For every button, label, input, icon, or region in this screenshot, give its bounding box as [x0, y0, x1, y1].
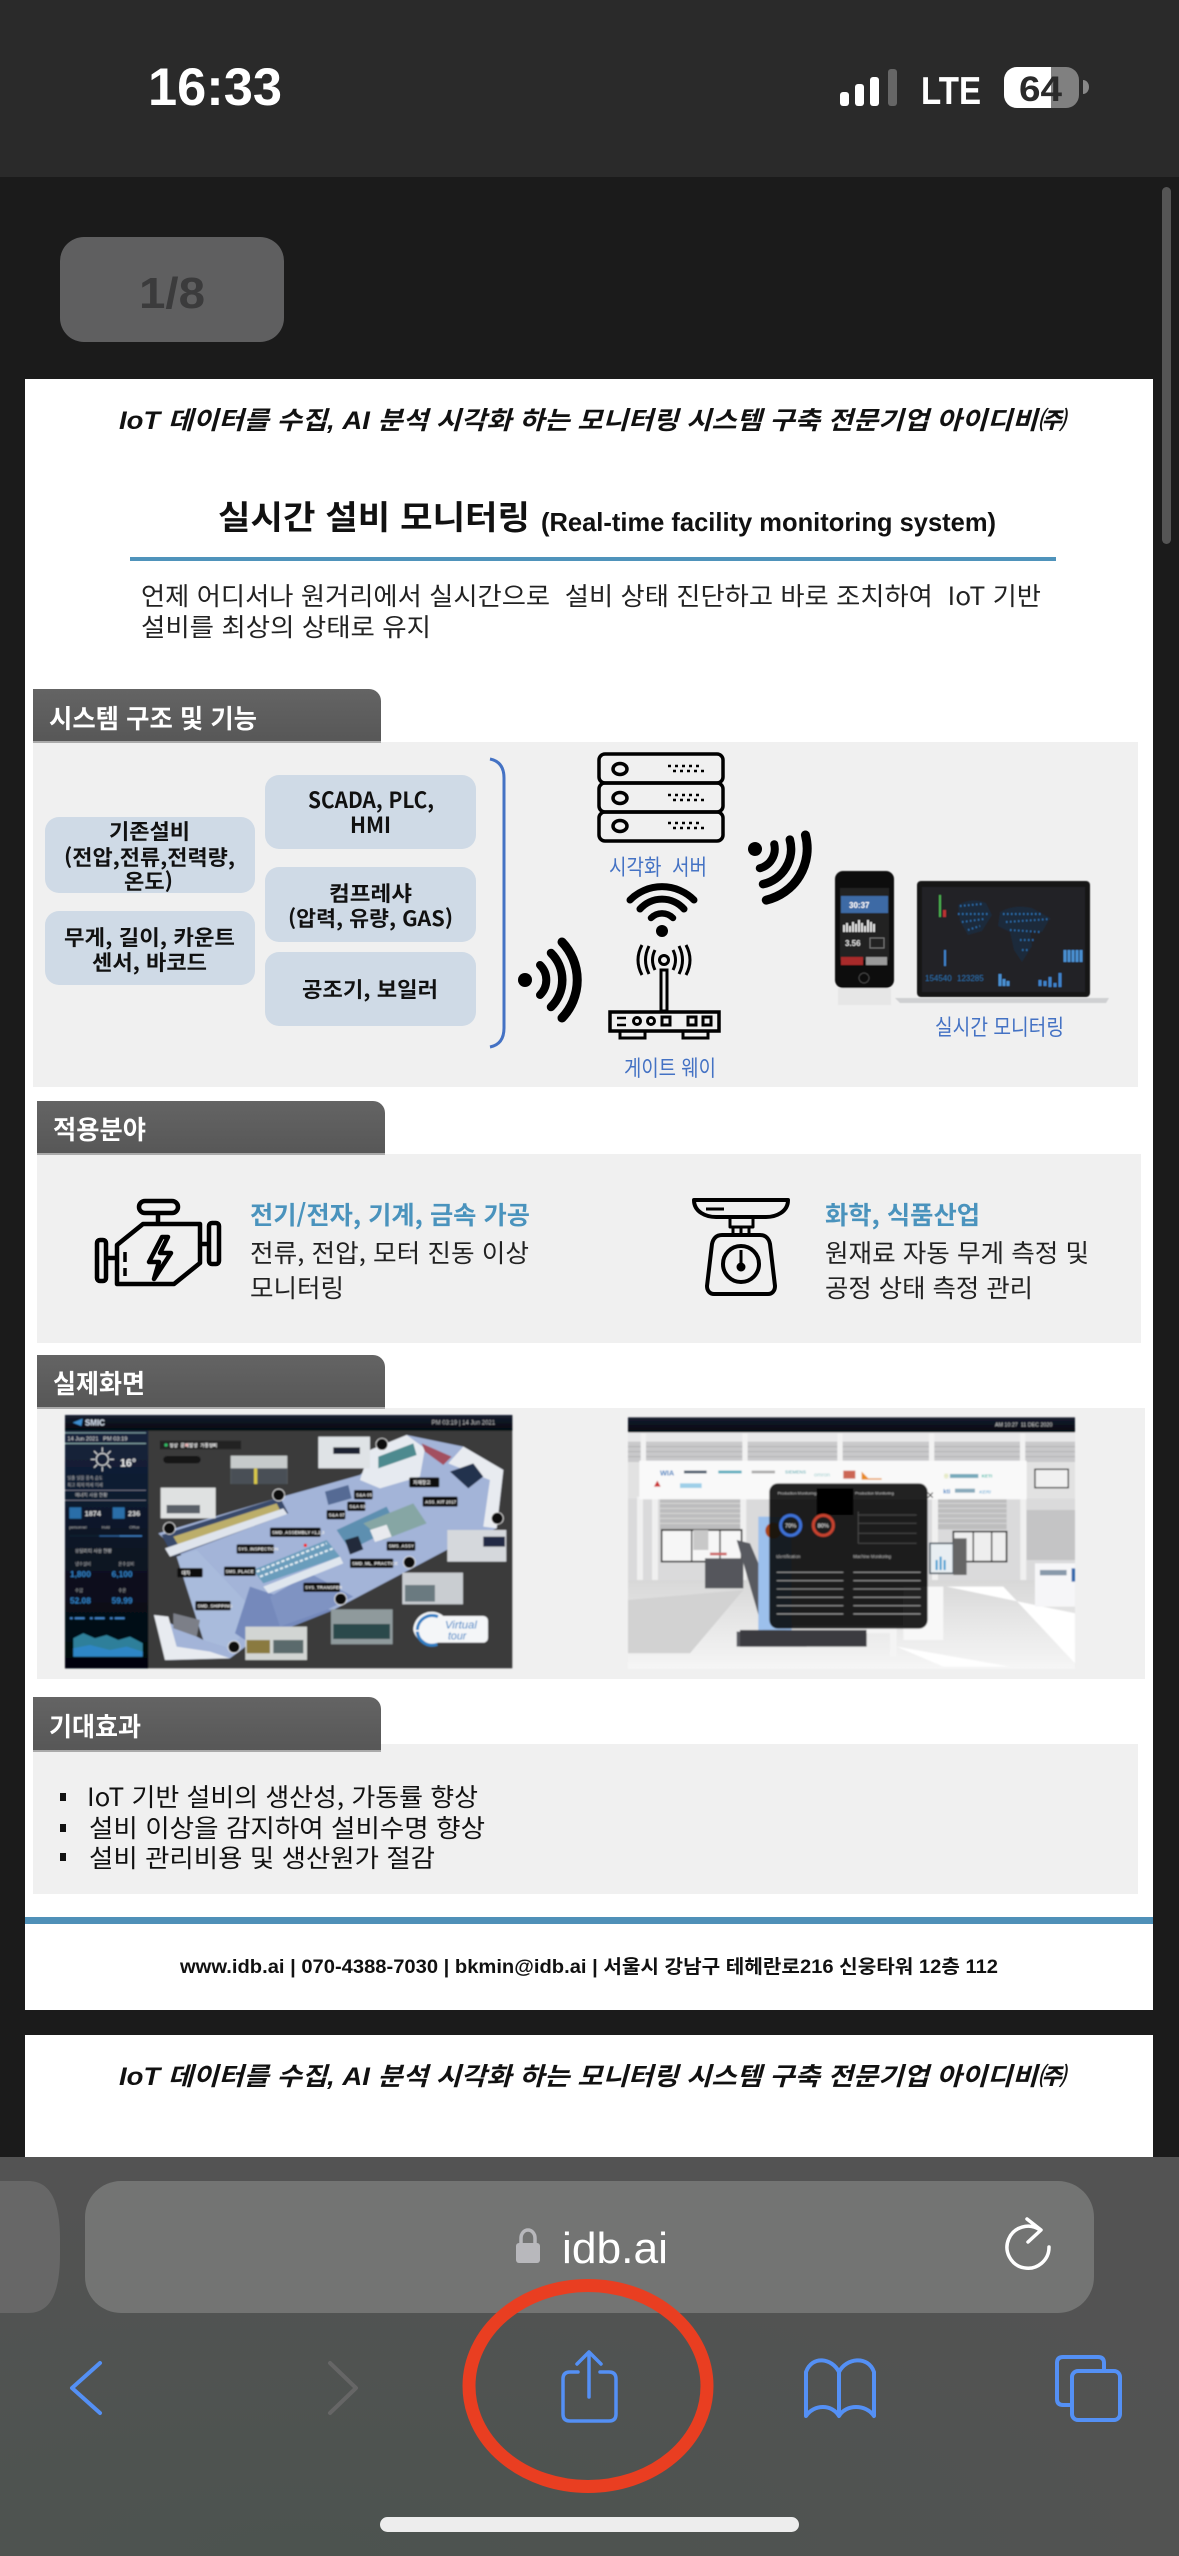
screenshot: factory map dashboard: Hold — [102, 1524, 110, 1529]
screenshot: factory map dashboard: 대차 — [182, 1569, 191, 1576]
text: chemical field: 화학, 식품산업 — [825, 1196, 980, 1232]
screenshot: machine monitoring popup: kti — [943, 1489, 951, 1495]
screenshot: factory map dashboard: 16° — [120, 1458, 136, 1470]
screenshot: factory map dashboard: 정상 문제발생 가동정지 — [169, 1442, 217, 1449]
screenshot: machine monitoring popup: AM 10:27 11 DEC 2020 — [995, 1423, 1052, 1429]
bullet list: 설비 이상을 감지하여 설비수명 향상 — [89, 1809, 485, 1845]
screenshot: factory map dashboard: tour — [448, 1630, 467, 1642]
screenshot: factory map dashboard: 자재창고 — [413, 1479, 431, 1486]
title: (Real-time facility monitoring system) — [541, 507, 996, 537]
screenshot: machine monitoring popup — [628, 1417, 1075, 1669]
screenshot: factory map dashboard: S&A 05 — [356, 1492, 373, 1497]
label: gateway: 게이트 웨이 — [624, 1051, 716, 1083]
icon: wireless signal left — [518, 942, 577, 1018]
screenshot: factory map dashboard: SMS_ASSY — [389, 1544, 415, 1549]
tagline: IoT 데이터를 수집, AI 분석 시각화 하는 모니터링 시스템 구축 전문기업 아이디비㈜ — [119, 407, 1068, 435]
equipment labels — [160, 1441, 241, 1449]
bullet list: IoT 기반 설비의 생산성, 가동률 향상 — [87, 1778, 478, 1814]
section header: system structure: 시스템 구조 및 기능 — [49, 699, 257, 736]
icon: laptop: 123285 — [957, 974, 984, 983]
scrollbar — [1162, 187, 1171, 544]
label: real-time monitoring: 실시간 모니터링 — [935, 1010, 1064, 1042]
virtual tour badge — [413, 1612, 488, 1644]
box: existing equipment — [45, 816, 255, 896]
icon: forward — [330, 2363, 356, 2413]
address bar — [85, 2181, 1094, 2313]
icon: wireless signal right — [729, 813, 819, 908]
section header: application fields — [37, 1101, 385, 1155]
section header: actual screens: 실제화면 — [53, 1364, 145, 1401]
factory floor — [154, 1435, 503, 1660]
screenshot: factory map dashboard: 수온 — [118, 1588, 126, 1594]
popup — [769, 1483, 928, 1629]
text: chemical field: 공정 상태 측정 관리 — [825, 1269, 1033, 1305]
box: SCADA — [265, 775, 476, 849]
screenshot: factory map dashboard: Virtual — [445, 1620, 477, 1632]
icon: weighing scale — [694, 1200, 788, 1294]
screenshot: factory map dashboard: 수압 — [75, 1587, 83, 1594]
section header: expected effects — [33, 1697, 381, 1752]
page 2 sheet — [25, 2035, 1153, 2157]
footer contact: www.idb.ai | 070-4388-7030 | bkmin@idb.ai | 서울시 강남구 테헤란로216 신웅타워 12층 112 — [179, 1956, 998, 1978]
title — [218, 491, 996, 539]
icon: lock — [516, 2230, 540, 2263]
page 2 tagline: IoT 데이터를 수집, AI 분석 시각화 하는 모니터링 시스템 구축 전문기업 아이디비㈜ — [119, 2063, 1068, 2091]
icon: engine — [97, 1201, 219, 1284]
screenshot: factory map dashboard: Office — [129, 1524, 140, 1529]
screenshot: factory map dashboard: ASS_KIT 2017 — [425, 1499, 457, 1504]
icon: battery: 64 — [1019, 70, 1063, 109]
box: existing equipment: 온도) — [124, 866, 173, 896]
screenshot: factory map dashboard: SMS_PLACE — [225, 1569, 254, 1574]
screenshot: machine monitoring popup: Machine Monitoring — [853, 1554, 892, 1559]
icon: reload — [1007, 2219, 1049, 2268]
page counter badge: 1/8 — [139, 269, 205, 318]
screenshot: machine monitoring popup: 80% — [818, 1523, 829, 1529]
footer rule — [25, 1917, 1153, 1924]
icon: signal bars — [840, 69, 897, 106]
panel: application fields — [37, 1101, 1141, 1343]
screenshot: factory map dashboard: 에너지 사용 현황 — [75, 1492, 108, 1499]
screenshot: factory map dashboard: SYS_INSPECTION — [238, 1547, 279, 1552]
bullet list: 설비 관리비용 및 생산원가 절감 — [89, 1839, 435, 1875]
screenshot: factory map dashboard: SMIC — [85, 1419, 105, 1428]
text: chemical field — [825, 1196, 1089, 1305]
screenshot: machine monitoring popup: KERI — [979, 1489, 992, 1495]
box: SCADA: HMI — [350, 808, 391, 840]
box: sensors: 무게, 길이, 카운트 — [64, 922, 235, 952]
bullet list — [60, 1778, 485, 1875]
box: air handling: 공조기, 보일러 — [302, 974, 438, 1004]
page 1 sheet — [25, 379, 1153, 2010]
screenshot: factory map dashboard: S&A 07 — [329, 1512, 345, 1517]
screenshot: factory map dashboard: SMD_SHIPPING — [197, 1603, 233, 1608]
machine body — [705, 1558, 743, 1588]
wall shutters — [628, 1499, 1075, 1587]
section header: system structure — [33, 689, 381, 743]
annotation: red circle around share — [469, 2286, 707, 2486]
clock: 16:33 — [148, 58, 282, 117]
thumbnails — [318, 1437, 370, 1468]
screenshot: machine monitoring popup: 70% — [785, 1523, 796, 1529]
icon: tabs — [1057, 2357, 1120, 2420]
sponsor banner — [639, 1461, 1027, 1499]
box: compressor: 컴프레샤 — [329, 878, 412, 908]
screenshot: machine monitoring popup: SIEMENS — [785, 1469, 806, 1474]
bracket — [490, 759, 504, 1047]
section header: application fields: 적용분야 — [53, 1110, 146, 1147]
icon: back — [72, 2363, 100, 2413]
screenshot: factory map dashboard: 6,100 — [112, 1569, 133, 1579]
url: idb.ai — [562, 2224, 668, 2273]
text: chemical field: 원재료 자동 무게 측정 및 — [825, 1234, 1089, 1270]
icon: smartphone — [835, 871, 894, 1005]
title rule — [130, 557, 1056, 561]
screenshot: factory map dashboard: SYS_TRANSFER — [305, 1585, 343, 1590]
screenshot: machine monitoring popup: Production Monitoring — [778, 1491, 816, 1496]
screenshot: factory map dashboard: 59.99 — [112, 1595, 133, 1605]
screenshot: factory map dashboard — [65, 1415, 512, 1668]
icon: gateway router — [610, 945, 719, 1038]
title: 실시간 설비 모니터링 — [218, 491, 530, 539]
screenshot: machine monitoring popup: KETI — [982, 1473, 992, 1478]
screenshot: factory map dashboard: 일출 일몰 풍속 습도 — [67, 1474, 103, 1481]
description — [141, 577, 1041, 644]
icon: battery — [1004, 67, 1089, 109]
screenshot: machine monitoring popup: omron — [814, 1472, 830, 1478]
icon: laptop — [895, 881, 1109, 1003]
box: compressor: (압력, 유량, GAS) — [288, 903, 453, 933]
screenshot: factory map dashboard: 유틸리티 사용 현황 — [75, 1547, 113, 1554]
screenshot: machine monitoring popup: Identification — [776, 1554, 801, 1559]
panel: actual screens — [37, 1355, 1145, 1679]
screenshot: machine monitoring popup: Production Monitoring — [855, 1491, 894, 1496]
box: existing equipment: 기존설비 — [109, 816, 190, 846]
icon: smartphone: 30:37 — [849, 901, 870, 910]
icon: server rack — [599, 754, 723, 841]
panel: expected effects — [33, 1697, 1138, 1894]
status bar — [0, 0, 1179, 177]
screenshot: machine monitoring popup: WIA — [660, 1469, 675, 1478]
box: sensors: 센서, 바코드 — [92, 947, 207, 977]
floor — [628, 1580, 1075, 1669]
label: server: 시각화 서버 — [609, 850, 707, 882]
adjacent tab — [0, 2181, 60, 2313]
description: 언제 어디서나 원거리에서 실시간으로 설비 상태 진단하고 바로 조치하여 IoT 기반 — [141, 577, 1041, 613]
box: air handling — [265, 952, 476, 1026]
windows — [662, 1530, 742, 1562]
icon: bookmarks — [806, 2360, 874, 2416]
screenshot: factory map dashboard: 236 — [128, 1509, 140, 1518]
text: electrical field: 모니터링 — [250, 1269, 344, 1305]
description: 설비를 최상의 상태로 유지 — [141, 608, 431, 644]
text: electrical field: 전기/전자, 기계, 금속 가공 — [250, 1196, 530, 1232]
box: SCADA: SCADA, PLC, — [308, 783, 434, 815]
text: electrical field — [250, 1196, 530, 1305]
text: electrical field: 전류, 전압, 모터 진동 이상 — [250, 1234, 529, 1270]
screenshot: factory map dashboard: 온수설비 — [118, 1560, 134, 1567]
screenshot: factory map dashboard: 냉수설비 — [75, 1560, 91, 1567]
browser toolbar — [0, 2157, 1179, 2556]
panel: system structure — [33, 689, 1138, 1087]
camera markers — [163, 1438, 503, 1653]
screenshot: factory map dashboard: S&A 03 — [349, 1504, 366, 1509]
screenshot: factory map dashboard: 최고 최저 미세 미세 — [67, 1482, 103, 1489]
screenshot: factory map dashboard: 14 Jun 2021 PM 03:19 — [67, 1437, 127, 1443]
screenshot: factory map dashboard: 52.08 — [70, 1595, 91, 1605]
section header: expected effects: 기대효과 — [49, 1707, 141, 1744]
screenshot: factory map dashboard: PM 03:19 | 14 Jun 2021 — [432, 1421, 496, 1427]
screenshot: factory map dashboard: SMD_ML_PRACTICE — [352, 1561, 398, 1566]
box: sensors — [45, 911, 255, 985]
screenshot: machine monitoring popup: × — [927, 1488, 934, 1502]
screenshot: machine monitoring popup: ※ — [943, 1474, 949, 1481]
icon: laptop: 154540 — [925, 974, 952, 983]
screenshot: factory map dashboard: 1,800 — [70, 1569, 91, 1579]
icon: share — [563, 2352, 616, 2421]
box: existing equipment: (전압,전류,전력량, — [64, 842, 235, 872]
icon: wifi — [630, 887, 694, 937]
screenshot: factory map dashboard: personnel — [69, 1524, 87, 1529]
screenshot: factory map dashboard: 1874 — [85, 1509, 102, 1518]
page counter badge — [60, 237, 284, 342]
box: compressor — [265, 867, 476, 942]
home indicator — [380, 2517, 799, 2532]
icon: smartphone: 3.56 — [845, 939, 861, 948]
network label: LTE — [921, 70, 981, 113]
section header: actual screens — [37, 1355, 385, 1409]
ceiling — [628, 1432, 1075, 1462]
screenshot: factory map dashboard: SMD_ASSEMBLY #1,2,3 — [272, 1530, 325, 1535]
